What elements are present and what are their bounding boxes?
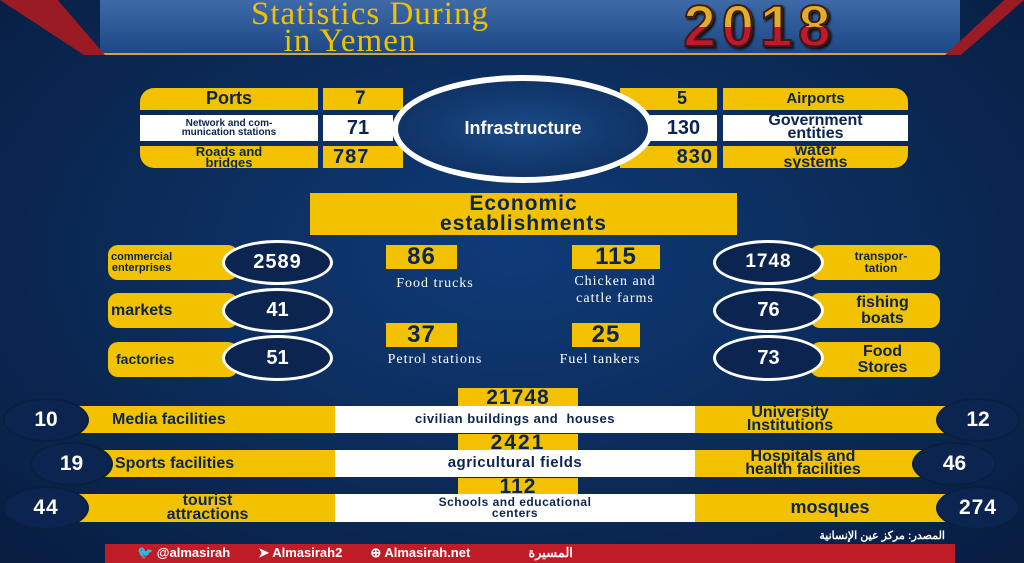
left red corner	[0, 0, 105, 55]
heading: economic establishments	[310, 193, 737, 235]
row 3	[458, 478, 578, 495]
panel: economic left: enterprises	[112, 262, 171, 274]
panel: economic right: 73	[757, 346, 780, 368]
panel: infrastructure: systems	[783, 154, 848, 171]
panel: bottom rows: attractions	[167, 506, 248, 523]
right red corner	[945, 0, 1024, 55]
panel: economic middle: 25	[592, 321, 620, 348]
row 3: 112	[500, 475, 536, 498]
panel: bottom rows: agricultural fields	[448, 454, 582, 471]
panel: economic right: tation	[865, 260, 897, 274]
panel: infrastructure: Airports	[786, 90, 845, 107]
panel: bottom rows: Sports facilities	[115, 455, 234, 472]
panel: economic left: 2589	[253, 251, 302, 273]
panel: economic left: 41	[266, 299, 289, 321]
row: network: munication stations	[182, 127, 276, 138]
source text: المصدر: مركز عين الإنسانية	[819, 530, 945, 542]
panel: economic right: transpor-	[855, 249, 907, 263]
panel: economic middle: 115	[595, 243, 637, 270]
panel: economic left: markets	[111, 302, 172, 319]
row: roads	[140, 146, 318, 168]
panel: economic right: 1748	[745, 251, 792, 272]
heading: economic establishments: Economic	[469, 192, 578, 215]
year 2018	[625, 2, 895, 52]
panel: bottom rows: Schools and educational	[439, 495, 591, 509]
row 2	[458, 434, 578, 451]
panel: economic left: 51	[266, 346, 289, 368]
panel: bottom rows: 44	[33, 496, 59, 519]
row: airports	[620, 88, 717, 110]
panel: economic left: commercial	[111, 251, 172, 263]
footer band: ⊕ Almasirah.net	[370, 545, 470, 560]
footer band: 🐦 @almasirah	[137, 545, 230, 560]
title: in Yemen	[284, 23, 416, 59]
row: ports: Ports	[206, 88, 252, 108]
panel: economic right: Food	[863, 343, 902, 360]
panel: bottom rows: 46	[943, 452, 966, 475]
panel: economic middle: Petrol stations	[388, 352, 482, 367]
panel: bottom rows: 19	[60, 452, 83, 475]
panel: bottom rows	[3, 386, 1020, 528]
panel: economic middle: Food trucks	[396, 276, 474, 291]
panel: infrastructure: 7	[355, 88, 366, 109]
row 2: 2421	[491, 431, 545, 454]
panel: economic left	[108, 240, 333, 381]
title	[251, 0, 489, 59]
footer band: ➤ Almasirah2	[258, 545, 342, 560]
panel: bottom rows: 12	[966, 408, 990, 431]
row: roads: Roads and	[196, 144, 262, 159]
panel: economic middle: cattle farms	[576, 291, 654, 306]
panel: bottom rows: centers	[492, 506, 538, 520]
row: government	[650, 115, 717, 141]
panel: infrastructure: water	[795, 142, 836, 159]
row 1	[458, 388, 578, 407]
row: roads: bridges	[206, 155, 252, 170]
row: airports: 5	[677, 88, 687, 108]
panel: economic right: boats	[861, 310, 904, 326]
panel: bottom rows: civilian buildings and houses	[415, 411, 615, 426]
panel: economic middle: 37	[407, 321, 436, 348]
panel: economic left: factories	[116, 351, 174, 367]
heading: economic establishments: establishments	[440, 212, 607, 235]
row: water: 830	[677, 146, 713, 168]
panel: bottom rows: Hospitals and	[751, 448, 855, 465]
panel: economic right	[713, 240, 940, 381]
footer band: المسيرة	[528, 545, 573, 560]
row: network	[140, 115, 318, 141]
panel: bottom rows: health facilities	[745, 460, 861, 478]
circle: infrastructure: Infrastructure	[464, 118, 582, 138]
panel: infrastructure: Government	[768, 112, 863, 129]
panel: economic right: 76	[757, 299, 780, 321]
panel: infrastructure	[140, 75, 908, 183]
panel: economic middle: Chicken and	[574, 274, 656, 289]
row: water	[620, 146, 717, 168]
panel: economic middle	[386, 243, 660, 367]
panel: bottom rows: 274	[959, 496, 997, 519]
footer band	[105, 544, 955, 563]
header band	[100, 0, 960, 55]
panel: infrastructure: entities	[787, 125, 844, 142]
panel: bottom rows: mosques	[790, 497, 870, 517]
row: government: 130	[667, 116, 700, 138]
panel: economic right: fishing	[856, 294, 909, 311]
panel: economic middle: Fuel tankers	[560, 352, 640, 367]
row 1: 21748	[486, 386, 550, 409]
circle: infrastructure	[392, 75, 654, 183]
panel: bottom rows: Media facilities	[112, 411, 226, 428]
panel: bottom rows: 10	[34, 408, 58, 431]
row: network: Network and com-	[186, 118, 272, 128]
panel: bottom rows: University	[751, 404, 829, 421]
panel: bottom rows: tourist	[183, 492, 232, 509]
panel: bottom rows: Institutions	[747, 416, 833, 434]
panel: infrastructure: 71	[347, 116, 369, 138]
panel: economic middle: 86	[407, 243, 436, 270]
panel: infrastructure: 787	[333, 146, 369, 168]
row: ports	[140, 88, 318, 110]
panel: economic right: Stores	[858, 358, 907, 376]
